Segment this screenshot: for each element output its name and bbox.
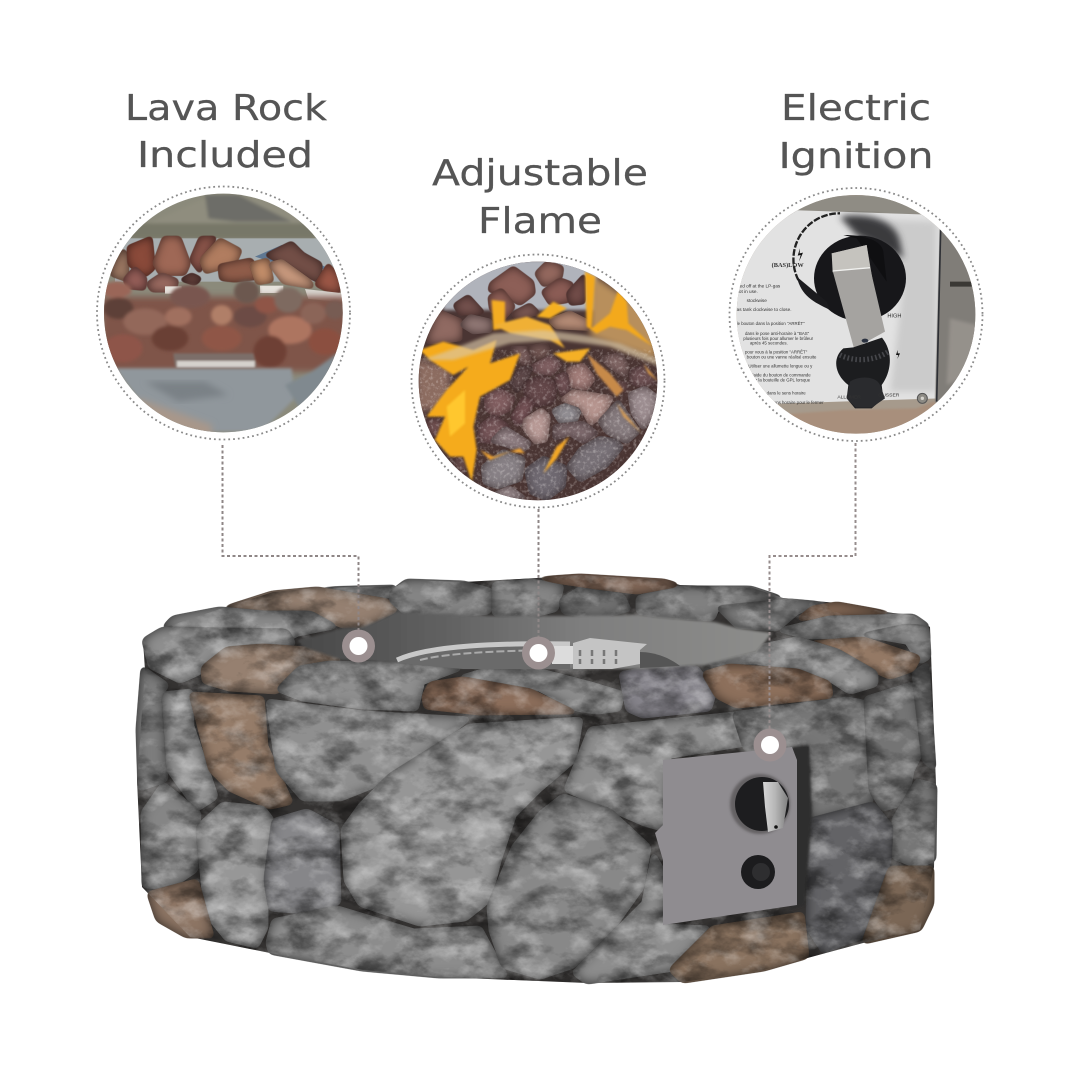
connector: adjustable flame — [538, 509, 540, 640]
heading: Electric Ignition: Ignition — [778, 136, 934, 177]
panel: electric ignition photo circle: pour vous à la position "ARRÊT" — [745, 349, 808, 354]
gas knob — [730, 774, 790, 834]
panel: electric ignition photo circle: plusieurs fois pour allumer le brûleur — [743, 336, 814, 341]
inner basin — [297, 612, 772, 669]
fire pit — [137, 575, 937, 985]
heading: Electric Ignition — [778, 88, 934, 177]
panel: electric ignition photo circle: Utiliser une allumette longue ou y — [748, 364, 813, 369]
connector: lava rock — [222, 445, 358, 632]
heading: Electric Ignition: Electric — [781, 88, 931, 129]
burner ring — [397, 638, 680, 669]
panel: electric ignition photo circle: (BAS)LOW — [772, 262, 804, 269]
heading: Lava Rock Included — [125, 88, 327, 176]
panel: electric ignition photo circle: HIGH — [887, 314, 901, 320]
heading: Lava Rock Included: Lava Rock — [125, 88, 327, 129]
connector: electric ignition — [770, 443, 856, 732]
panel: electric ignition photo circle: is not in use. — [732, 289, 758, 294]
heading: Adjustable Flame — [432, 153, 648, 242]
panel: electric ignition photo circle: as tank clockwise to close. — [737, 307, 792, 312]
panel: electric ignition photo circle: ar la bouteille de GPL lorsque — [753, 378, 811, 383]
marker dot: lava rock — [342, 630, 375, 662]
panel: electric ignition photo circle: dans le sens horaire — [767, 390, 806, 395]
panel: electric ignition photo circle: dans le pose anti-horaire à "BAS" — [745, 331, 810, 336]
panel: electric ignition photo circle: turned off at the LP-gas — [732, 284, 781, 289]
panel: electric ignition photo circle: après 45 secondes. — [750, 340, 788, 345]
wall stones — [137, 663, 936, 983]
heading: Adjustable Flame: Flame — [478, 201, 602, 242]
fire pit silhouette — [137, 575, 936, 983]
panel: electric ignition photo circle: ALLUMER — [837, 394, 861, 400]
panel: electric ignition photo circle: le bouton dans la position "ARRÊT" — [737, 321, 805, 326]
igniter button — [741, 855, 775, 889]
heading: Lava Rock Included: Included — [137, 135, 313, 176]
marker dot: adjustable flame — [522, 636, 555, 670]
panel: electric ignition photo circle: l'aide du bouton de commande — [752, 373, 811, 378]
panel: adjustable flame photo circle — [410, 250, 670, 510]
rim stones — [143, 575, 930, 717]
panel: electric ignition photo circle: stockwise — [747, 298, 767, 303]
panel: electric ignition photo circle: bouton ou une vanne réalisé ensuite — [747, 354, 817, 359]
panel: electric ignition photo circle: sens horaire pour le fermer — [772, 400, 824, 405]
control panel — [655, 745, 812, 925]
stone texture — [137, 575, 937, 985]
heading: Adjustable Flame: Adjustable — [432, 153, 648, 194]
marker dot: electric ignition — [754, 728, 786, 762]
panel: electric ignition photo circle — [730, 185, 990, 445]
panel: electric ignition photo circle: OUSSER — [878, 393, 900, 399]
panel: lava rock photo circle — [95, 185, 355, 445]
